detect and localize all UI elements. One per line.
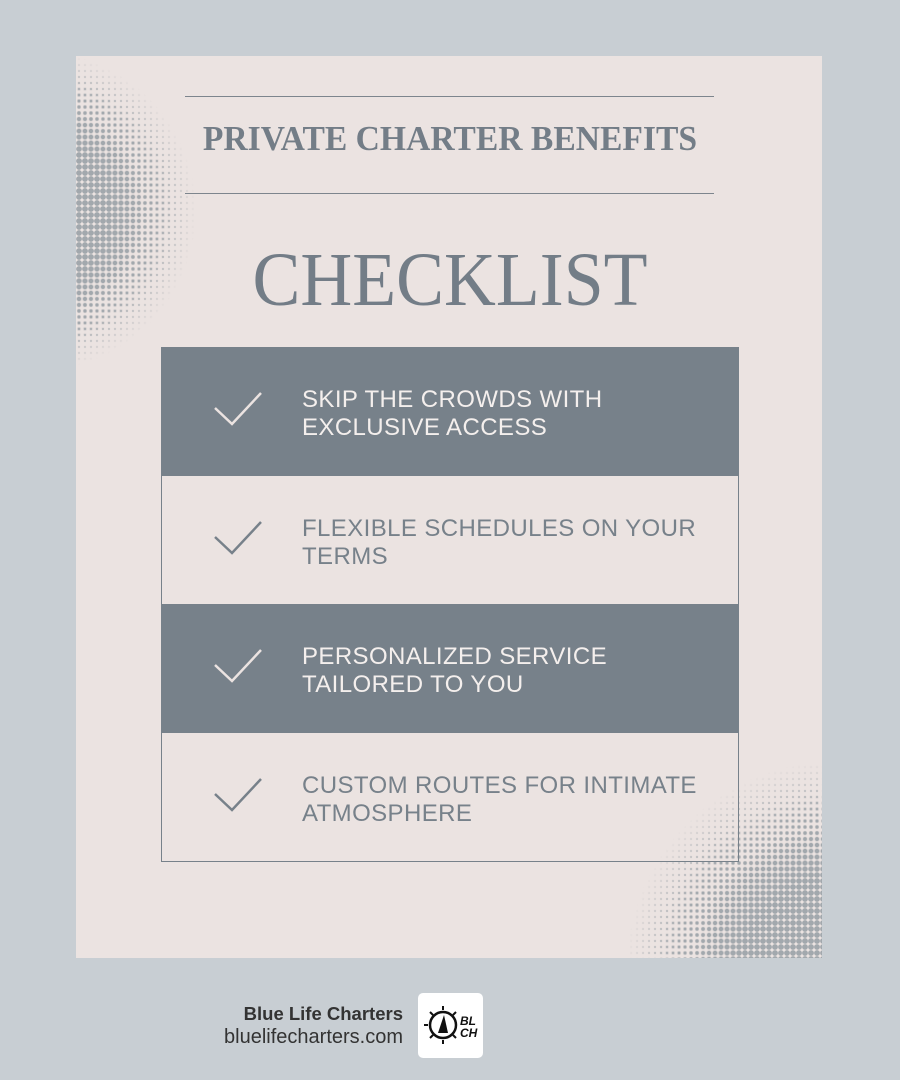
text [302, 643, 607, 698]
icon: check [214, 649, 262, 683]
text: PERSONALIZED SERVICE [302, 643, 607, 670]
row 4 [161, 733, 739, 862]
text [302, 772, 697, 827]
halftone top-left [76, 64, 188, 360]
text: CUSTOM ROUTES FOR INTIMATE [302, 772, 697, 799]
icon: check [214, 521, 262, 555]
row 1 [161, 347, 739, 476]
icon: check [214, 392, 262, 426]
footer brand text [224, 1003, 403, 1048]
text: SKIP THE CROWDS WITH [302, 386, 602, 413]
text: ATMOSPHERE [302, 800, 472, 827]
footer brand text: bluelifecharters.com [224, 1026, 403, 1048]
halftone bottom-right [636, 768, 822, 958]
text: FLEXIBLE SCHEDULES ON YOUR [302, 515, 696, 542]
logo: CH [460, 1026, 478, 1040]
text: TAILORED TO YOU [302, 671, 524, 698]
logo [418, 993, 483, 1058]
row 2 [161, 476, 739, 604]
heading: checklist: CHECKLIST [252, 238, 648, 322]
text: TERMS [302, 543, 388, 570]
text [302, 386, 602, 441]
logo: BL [460, 1014, 476, 1028]
text [302, 515, 696, 570]
title: PRIVATE CHARTER BENEFITS [203, 119, 697, 158]
card [76, 56, 822, 958]
text: EXCLUSIVE ACCESS [302, 414, 547, 441]
row 3 [161, 604, 739, 733]
icon: check [214, 778, 262, 812]
footer brand text: Blue Life Charters [244, 1003, 403, 1024]
